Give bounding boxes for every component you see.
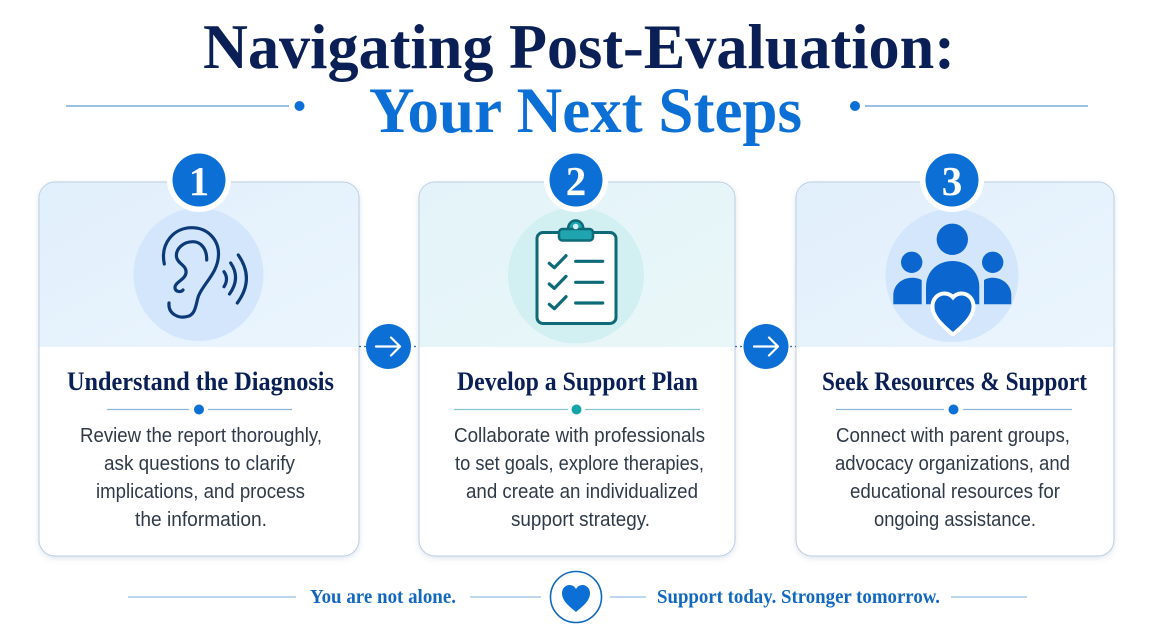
card body xyxy=(419,182,735,556)
card header band xyxy=(40,183,358,347)
card body xyxy=(39,182,359,556)
step description xyxy=(835,425,1070,531)
panel: step 3 seek resources and support xyxy=(796,182,1114,556)
step description: advocacy organizations, and xyxy=(835,453,1070,475)
footer message right: Support today. Stronger tomorrow. xyxy=(657,586,940,608)
step description: educational resources for xyxy=(850,481,1060,503)
step description: Connect with parent groups, xyxy=(836,425,1070,447)
card header band xyxy=(797,183,1113,347)
divider xyxy=(836,404,1072,414)
step description: Review the report thoroughly, xyxy=(80,425,322,447)
number badge 2: 2 xyxy=(566,158,586,204)
step description: and create an individualized xyxy=(466,481,698,503)
footer message left: You are not alone. xyxy=(310,586,456,608)
title: Navigating Post-Evaluation: xyxy=(203,11,955,82)
step description: implications, and process xyxy=(96,481,305,503)
number badge 1: 1 xyxy=(189,158,209,204)
title: Your Next Steps xyxy=(369,75,802,147)
step description: ongoing assistance. xyxy=(874,509,1036,531)
panel: step 2 develop a support plan xyxy=(419,182,735,556)
icon: heart in circle xyxy=(550,572,602,622)
divider xyxy=(454,404,700,414)
number badge 1 xyxy=(167,148,231,212)
divider xyxy=(107,404,292,414)
step description: the information. xyxy=(135,509,267,531)
title xyxy=(203,11,955,147)
step description: support strategy. xyxy=(511,509,650,531)
icon: clipboard checklist xyxy=(508,208,644,344)
icon: people with heart xyxy=(886,209,1018,342)
step heading: Understand the Diagnosis xyxy=(67,366,334,396)
step description xyxy=(454,425,705,531)
panel: step 1 understand the diagnosis xyxy=(39,182,359,556)
arrow: step 2 to step 3 xyxy=(735,324,796,369)
step description: ask questions to clarify xyxy=(104,453,295,475)
icon: ear xyxy=(134,208,264,341)
number badge 2 xyxy=(544,148,608,212)
step description: to set goals, explore therapies, xyxy=(455,453,704,475)
footer: tagline strip xyxy=(128,572,1027,622)
card header band xyxy=(420,183,734,347)
step heading: Develop a Support Plan xyxy=(457,366,698,396)
step description: Collaborate with professionals xyxy=(454,425,705,447)
number badge 3 xyxy=(920,148,984,212)
number badge 3: 3 xyxy=(942,158,962,204)
step heading: Seek Resources & Support xyxy=(822,366,1087,396)
title ornaments xyxy=(66,101,1088,111)
arrow: step 1 to step 2 xyxy=(359,324,419,369)
card body xyxy=(796,182,1114,556)
step description xyxy=(80,425,322,531)
